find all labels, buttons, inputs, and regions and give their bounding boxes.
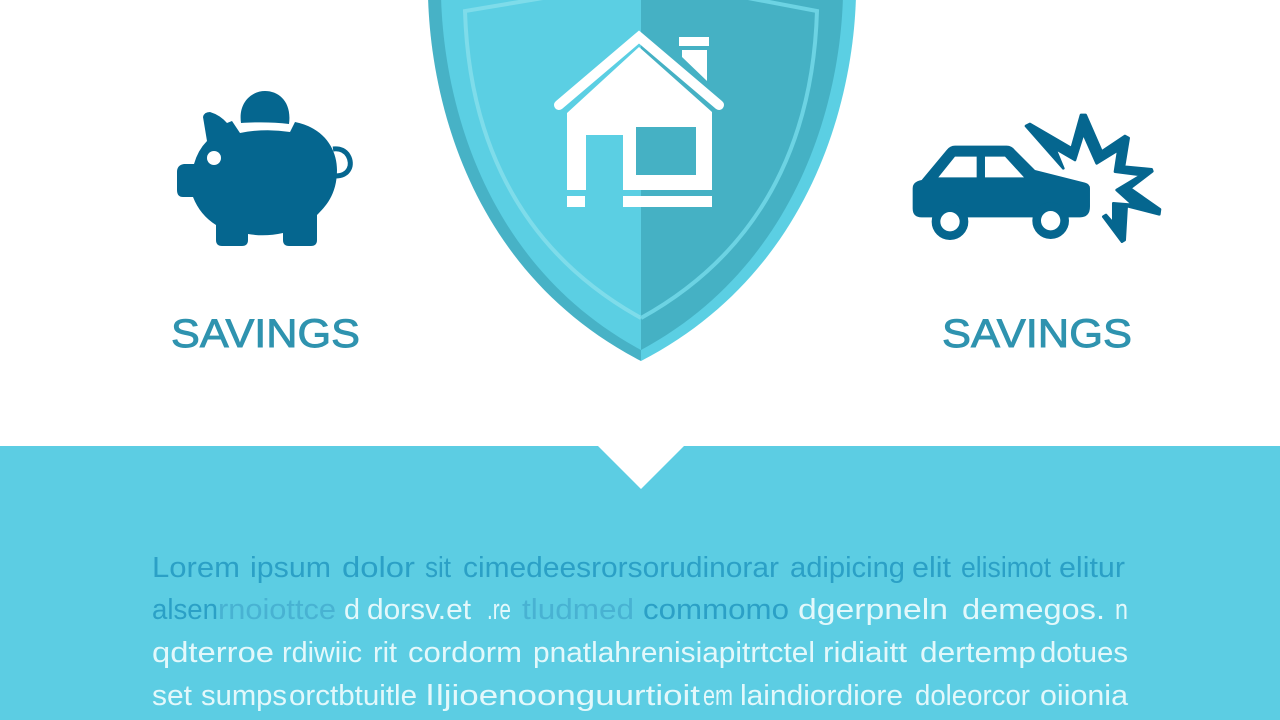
shield right half [641,0,856,361]
shield left half [428,0,641,361]
paragraph line 2 [152,594,1128,626]
house body [567,47,712,190]
icon: house [559,37,719,207]
paragraph line 4: sumps [201,680,287,712]
paragraph line 1: adipicing [790,552,905,584]
paragraph line 3: cordorm [408,637,522,669]
paragraph line 1: sit [425,552,451,584]
car windows [938,157,1024,177]
paragraph line 2: dgerpneln [798,594,948,626]
paragraph line 1: ipsum [250,552,331,584]
paragraph line 3: dertemp [920,637,1036,669]
paragraph line 2: alsen [152,594,218,626]
icon: shield [428,0,856,361]
house base strips [567,196,712,207]
paragraph line 3: rdiwiic [282,637,362,669]
paragraph line 3: rit [373,637,397,669]
paragraph line 1: cimedeesrorsorudinorar [463,552,779,584]
icon: piggy bank [177,91,350,246]
paragraph line 4: laindiordiore [740,680,903,712]
paragraph line 1: elit [912,552,951,584]
paragraph line 2: n [1115,594,1128,626]
car front wheel [1037,207,1065,235]
paragraph line 3: dotues [1040,637,1128,669]
house roof [559,37,719,105]
icon: car crash [913,115,1160,242]
paragraph line 4: em [703,680,733,712]
house window [636,127,696,175]
shield right inner face [641,0,843,350]
paragraph line 1: elitur [1059,552,1125,584]
label: left savings: SAVINGS [171,312,360,356]
paragraph line 2: rnoiottce [218,594,336,626]
text block: paragraph [152,552,1129,712]
paragraph line 2: dorsv.et [367,594,471,626]
paragraph line 4: oiionia [1040,680,1129,712]
paragraph line 1: Lorem [152,552,240,584]
car body [913,146,1090,217]
shield right inner outline [641,0,817,318]
panel: bottom text band with notch [0,446,1280,720]
shield left inner face [441,0,641,350]
paragraph line 4 [152,680,1129,712]
paragraph line 2: demegos. [962,594,1105,626]
crash burst [1026,115,1160,242]
label: right savings: SAVINGS [942,312,1132,356]
paragraph line 4: doleorcor [915,680,1030,712]
paragraph line 4: ljioenoonguurtioit [436,680,700,712]
pig eye [207,151,221,165]
house chimney [679,37,709,81]
paragraph line 4: orctbtuitle [289,680,417,712]
paragraph line 4: set [152,680,192,712]
paragraph line 3 [152,637,1128,669]
paragraph line 2: tludmed [522,594,634,626]
paragraph line 2: commomo [643,594,789,626]
paragraph line 2: .re [487,594,511,626]
paragraph line 3: pnatlahrenisiapitrtctel [533,637,815,669]
car rear wheel [936,208,964,236]
paragraph line 4: l [426,680,434,712]
paragraph line 1: dolor [342,552,415,584]
paragraph line 3: ridiaitt [823,637,907,669]
pig coin [241,91,289,124]
paragraph line 2: d [344,594,360,626]
shield left inner outline [465,0,641,318]
pig tail [333,149,350,176]
pig body [177,112,337,246]
paragraph line 1: elisimot [961,552,1051,584]
paragraph line 1 [152,552,1125,584]
paragraph line 3: qdterroe [152,637,274,669]
